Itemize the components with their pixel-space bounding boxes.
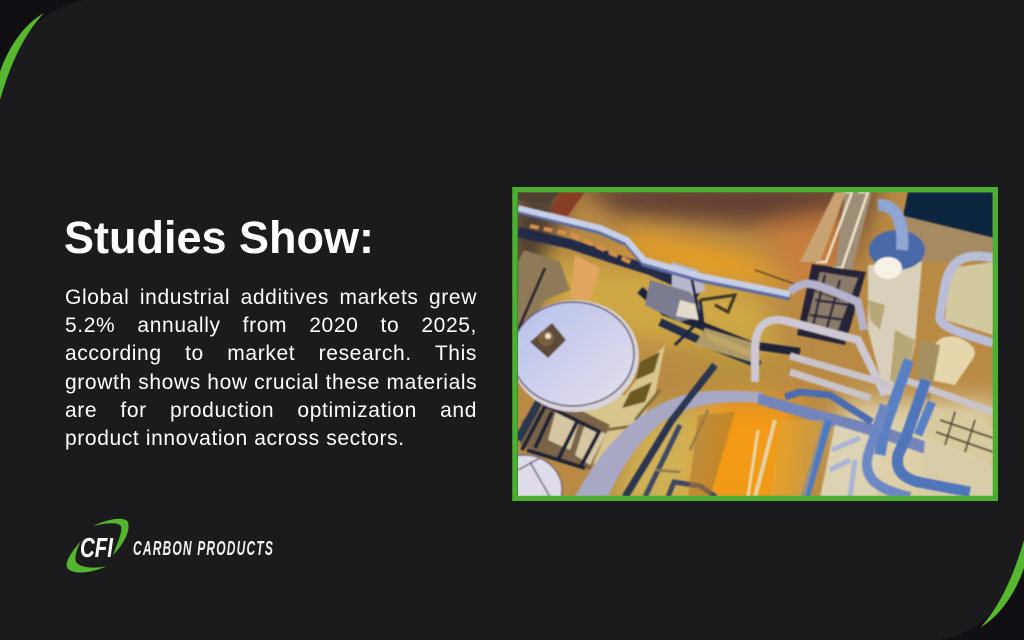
body text: according to market research. This <box>65 342 477 365</box>
upper right pipe loop <box>945 262 993 335</box>
lower right area cream <box>925 405 993 462</box>
small lower tank <box>518 454 564 496</box>
logo: CFI Carbon Products <box>66 518 274 572</box>
cream deck under tank <box>583 345 666 464</box>
body text: 5.2% annually from 2020 to 2025, <box>65 314 477 337</box>
body text: growth shows how crucial these materials <box>65 371 477 394</box>
large curved foreground pipe <box>575 391 762 497</box>
upper right dark block <box>903 192 993 238</box>
body text: Global industrial additives markets grew <box>65 286 477 309</box>
central tower <box>868 262 922 395</box>
blue lower pipe cluster <box>880 360 909 455</box>
mid-left tan patch <box>570 255 600 300</box>
large white tank <box>511 300 639 412</box>
body text: product innovation across sectors. <box>65 427 405 450</box>
industrial refinery photo with green frame <box>512 187 998 501</box>
logo mark text: CFI <box>80 532 114 563</box>
central column ladders <box>835 192 872 270</box>
body text: are for production optimization and <box>65 399 477 422</box>
dark vertical red ladders <box>518 262 546 312</box>
mid silver pipes <box>755 320 885 395</box>
icon: green logo swoosh <box>67 519 129 573</box>
body text <box>65 286 477 450</box>
lattice under tank <box>520 400 610 470</box>
title: Studies Show: <box>64 212 374 263</box>
main upper-left pipe <box>518 211 790 298</box>
steel girders <box>518 232 700 292</box>
